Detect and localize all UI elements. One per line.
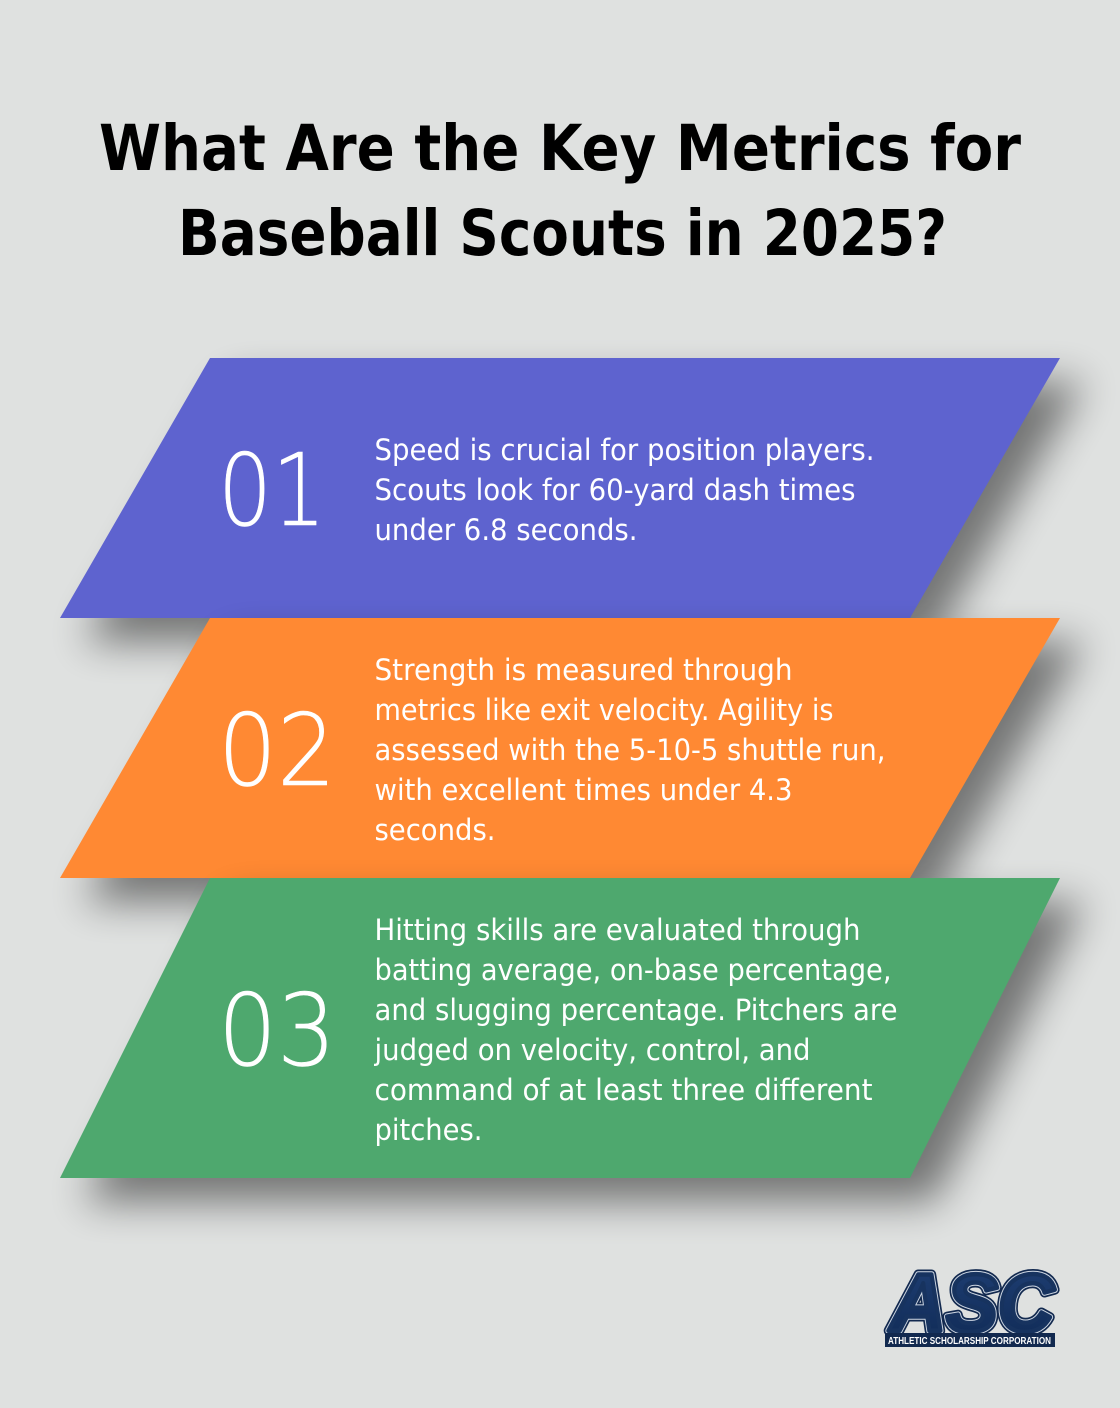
logo: ASC: ATHLETIC SCHOLARSHIP CORPORATION — [888, 1336, 1051, 1347]
text: skills: and slugging percentage. Pitchers are — [374, 993, 898, 1027]
number 01: 01 — [218, 432, 326, 549]
text: speed — [374, 433, 874, 547]
text: speed: Speed is crucial for position players. — [374, 433, 874, 467]
text: skills: batting average, on-base percentage, — [374, 953, 892, 987]
text: strength: seconds. — [374, 813, 496, 847]
title: What Are the Key Metrics for — [99, 112, 1021, 185]
logo: ASC: ASC — [888, 1258, 1056, 1349]
text: skills: Hitting skills are evaluated through — [374, 913, 860, 947]
text: skills: pitches. — [374, 1113, 482, 1147]
text: strength: assessed with the 5-10-5 shuttle run, — [374, 733, 886, 767]
number 03: 03 — [218, 972, 336, 1089]
text: strength: Strength is measured through — [374, 653, 792, 687]
number 02: 02 — [218, 692, 336, 809]
text: speed: under 6.8 seconds. — [374, 513, 638, 547]
text: strength — [374, 653, 886, 847]
panel: 03 skills — [60, 878, 1084, 1202]
text: skills — [374, 913, 898, 1147]
text: speed: Scouts look for 60-yard dash times — [374, 473, 856, 507]
panel: 02 strength — [60, 618, 1084, 902]
text: skills: command of at least three different — [374, 1073, 872, 1107]
panel: 01 speed — [60, 358, 1084, 642]
text: skills: judged on velocity, control, and — [374, 1033, 810, 1067]
logo: ASC: ASC — [888, 1258, 1056, 1349]
text: strength: metrics like exit velocity. Agility is — [374, 693, 834, 727]
title: Baseball Scouts in 2025? — [178, 197, 947, 270]
text: strength: with excellent times under 4.3 — [374, 773, 792, 807]
logo: ASC: ASC — [888, 1258, 1056, 1349]
title — [99, 112, 1021, 270]
